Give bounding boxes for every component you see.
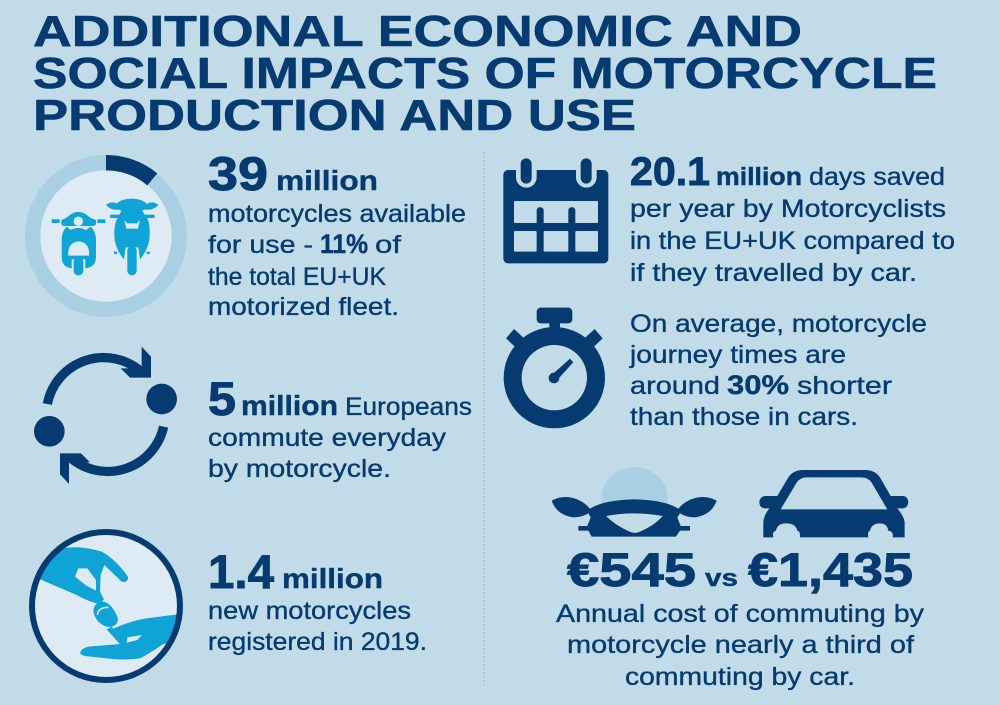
text: 39 million xyxy=(208,147,466,321)
icon: donut with two motorcycles xyxy=(25,155,187,317)
text: 39 million: 39 xyxy=(208,147,268,200)
icon: scooter xyxy=(52,212,105,275)
text: 39 million: of xyxy=(375,231,401,259)
text: journey times: journey times are xyxy=(629,341,846,369)
text: 20.1 million days saved: per year by Motorcyclists xyxy=(630,195,946,223)
title: PRODUCTION AND USE xyxy=(33,91,636,140)
text: 1.4 million: million xyxy=(282,563,383,594)
text: 39 million: motorized fleet. xyxy=(208,293,399,321)
icon: motorcycle front xyxy=(552,467,717,537)
icon: stopwatch xyxy=(504,308,605,428)
text: 20.1 million days saved: days saved xyxy=(809,163,945,191)
text: 20.1 million days saved: 20.1 xyxy=(630,150,710,194)
text: annual cost: commuting by car. xyxy=(625,663,855,691)
text: 5 million: by motorcycle. xyxy=(208,455,391,483)
text: 5 million xyxy=(208,372,472,483)
text: 39 million: million xyxy=(276,165,378,196)
text: journey times: around xyxy=(630,372,720,400)
icon: hands passing keys xyxy=(30,532,180,680)
icon: circular arrows xyxy=(34,347,177,484)
cost comparison figure: €545 xyxy=(567,543,696,596)
text: 1.4 million: new motorcycles xyxy=(208,597,411,625)
text: 20.1 million days saved: million xyxy=(716,163,802,191)
text: annual cost xyxy=(556,600,925,691)
cost comparison figure: vs xyxy=(705,565,738,592)
text: 1.4 million: registered in 2019. xyxy=(208,628,427,656)
text: journey times: than those in cars. xyxy=(630,403,858,431)
text: 39 million: the total EU+UK xyxy=(208,263,386,291)
title xyxy=(33,7,937,140)
cost comparison figure: €1,435 xyxy=(748,543,913,596)
text: 39 million: 11% xyxy=(320,229,368,259)
text: journey times xyxy=(629,310,927,431)
text: journey times: 30% xyxy=(727,370,789,400)
text: journey times: shorter xyxy=(797,372,892,400)
text: 5 million: 5 xyxy=(208,372,236,425)
title: ADDITIONAL ECONOMIC AND xyxy=(33,7,802,56)
text: 20.1 million days saved: in the EU+UK compared to xyxy=(630,227,955,255)
text: 5 million: million xyxy=(241,390,338,421)
cost comparison figure xyxy=(567,543,913,596)
text: journey times: On average, motorcycle xyxy=(630,310,927,338)
text: annual cost: motorcycle nearly a third of xyxy=(567,631,914,659)
text: 1.4 million: 1.4 xyxy=(208,545,274,598)
text: 39 million: motorcycles available xyxy=(208,200,466,228)
title: SOCIAL IMPACTS OF MOTORCYCLE xyxy=(33,49,937,98)
icon: calendar xyxy=(503,158,608,263)
text: 5 million: commute everyday xyxy=(208,424,447,452)
icon: car front xyxy=(759,470,908,537)
text: 20.1 million days saved: if they travelled by car. xyxy=(630,259,917,287)
text: annual cost: Annual cost of commuting by xyxy=(556,600,925,628)
text: 39 million: for use - xyxy=(208,231,313,259)
text: 5 million: Europeans xyxy=(345,393,472,421)
text: 1.4 million xyxy=(208,545,427,656)
text: 20.1 million days saved xyxy=(630,150,955,287)
icon: motorbike xyxy=(106,199,158,275)
